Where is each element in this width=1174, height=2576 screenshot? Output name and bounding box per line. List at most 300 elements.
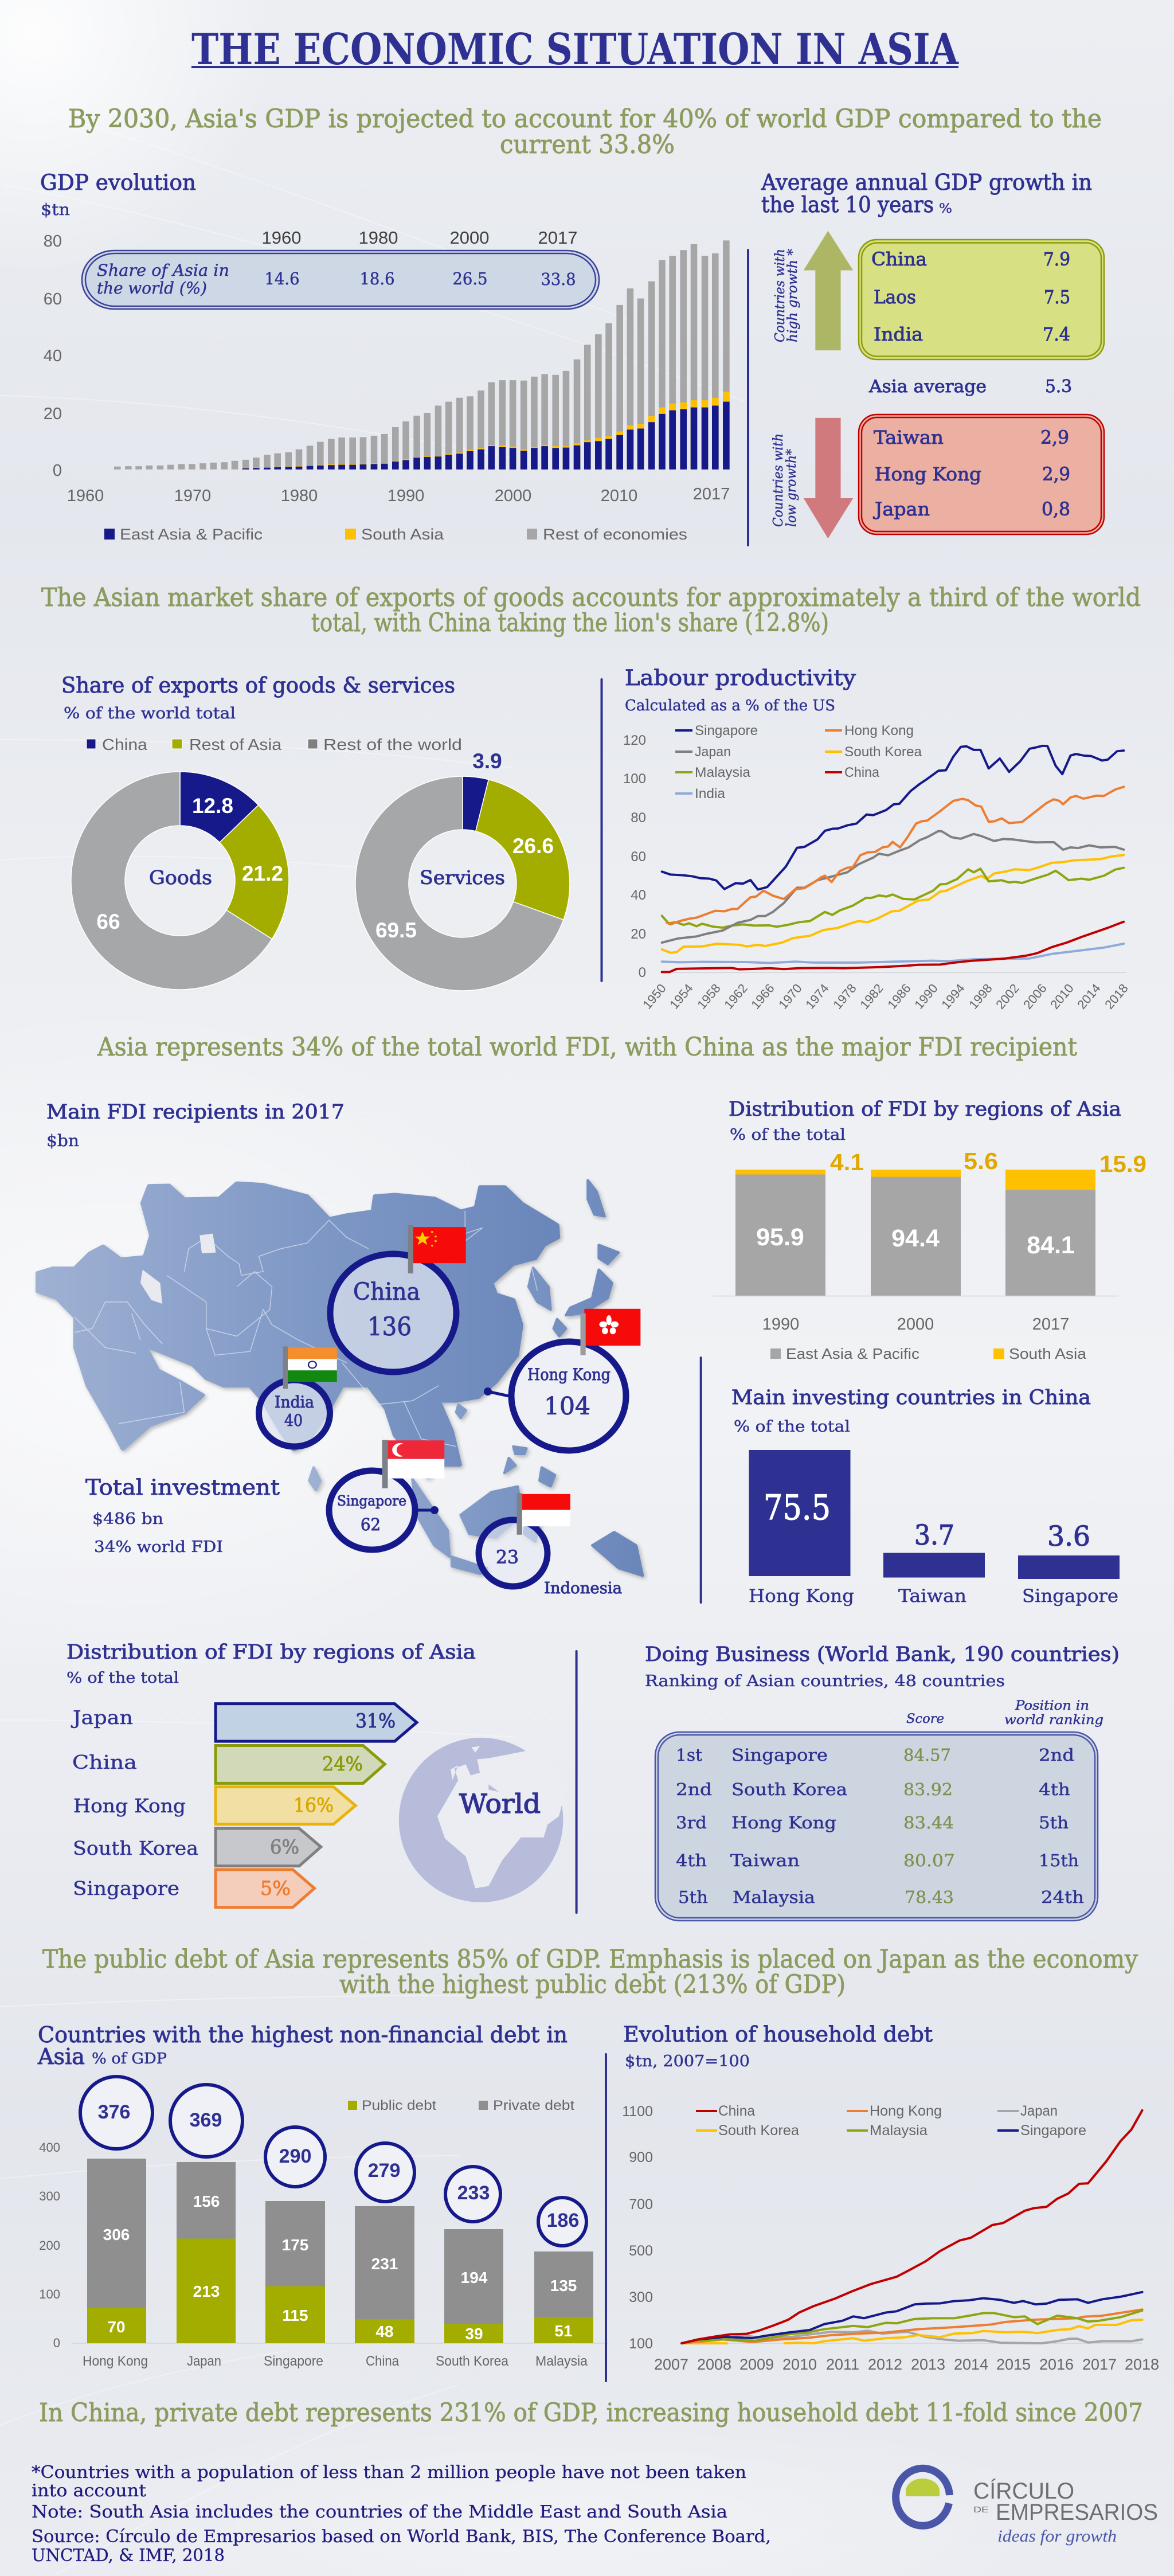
rotated label: high growth	[773, 249, 800, 342]
x axis labels: 2014	[1074, 981, 1103, 1012]
ranking table: 84.57	[903, 1745, 951, 1765]
legend: China	[102, 736, 147, 753]
y axis labels: 300	[39, 2189, 60, 2203]
x axis labels: 2018	[1102, 981, 1131, 1012]
stacked bars: 48	[375, 2323, 394, 2340]
subheading: Ranking of Asian countries, 48 countries	[645, 1672, 1005, 1690]
footnotes: Source: Círculo de Empresarios based on World Bank, BIS, The Conference Board,	[32, 2527, 771, 2547]
stacked bars: 231	[371, 2255, 398, 2273]
legend	[104, 526, 687, 543]
x axis labels: 2002	[993, 981, 1022, 1012]
x axis labels: 2010	[782, 2356, 817, 2373]
y axis labels: 40	[44, 347, 62, 365]
arrow values: 5%	[260, 1877, 291, 1900]
Asia average row	[868, 377, 1072, 397]
x axis labels	[640, 981, 1131, 1012]
legend: China	[844, 765, 880, 780]
icon: globe: World	[459, 1788, 541, 1819]
panel: average annual GDP growth	[761, 170, 1104, 538]
y axis labels: 40	[631, 888, 646, 903]
x axis labels: 2012	[868, 2356, 902, 2373]
box: high growth countries: China	[871, 248, 927, 270]
bars: 3.7	[914, 1519, 954, 1551]
title: THE ECONOMIC SITUATION IN ASIA	[191, 24, 960, 75]
section heading: FDI: Asia represents 34% of the total world FDI, with China as the major FDI recipient	[97, 1033, 1077, 1062]
legend: Singapore	[1020, 2122, 1086, 2139]
bars: Hong Kong	[749, 1586, 854, 1606]
legend: Rest of economies	[543, 526, 687, 543]
x axis labels: 2018	[1125, 2356, 1159, 2373]
share of Asia table: 33.8	[541, 269, 576, 289]
heading: GDP growth: the last 10 years	[761, 192, 934, 217]
rotated label: high growth: high growth *	[785, 249, 800, 342]
donut chart: services: 26.6	[512, 834, 554, 858]
legend: South Korea	[844, 744, 922, 760]
legend: Singapore	[695, 723, 758, 738]
category labels: South Korea	[436, 2354, 509, 2369]
x axis labels: 2010	[1047, 981, 1077, 1012]
ranking table: Malaysia	[733, 1887, 815, 1907]
bars: 3.6	[1047, 1520, 1090, 1553]
y axis labels: 80	[44, 232, 62, 251]
heading: main FDI recipients: Main FDI recipients in 2017	[46, 1101, 345, 1124]
share of Asia table: 2017	[538, 228, 577, 248]
x axis labels: 2015	[996, 2356, 1031, 2373]
donut chart: goods	[71, 772, 289, 990]
ring labels: China	[353, 1278, 420, 1305]
stacked bars: 51	[554, 2322, 573, 2340]
y axis labels: 20	[631, 927, 646, 942]
x axis labels: 1960	[67, 487, 104, 505]
category labels: Malaysia	[535, 2354, 588, 2369]
x axis labels: 1980	[281, 487, 318, 505]
stacked bars: 2000	[897, 1315, 934, 1334]
stacked bars: 2017	[1032, 1315, 1069, 1334]
ranking table: 83.44	[903, 1813, 954, 1832]
stacked bars: 84.1	[1027, 1232, 1075, 1259]
rotated label: high growth: Countries with	[773, 249, 788, 342]
legend: Japan	[1020, 2103, 1058, 2119]
footnotes	[32, 2462, 771, 2566]
column headings: Position in	[1015, 1699, 1089, 1713]
x axis labels: 1950	[640, 981, 669, 1012]
footnotes: Note: South Asia includes the countries of the Middle East and South Asia	[32, 2502, 727, 2522]
arrow: down	[804, 418, 853, 538]
India ring	[259, 1380, 330, 1447]
flag: India	[283, 1346, 337, 1389]
legend: Rest of the world	[323, 736, 462, 753]
box: low growth countries: 2,9	[1042, 463, 1070, 485]
box: low growth countries: Japan	[873, 498, 930, 520]
line chart: household debt	[682, 2110, 1142, 2343]
ranking table: 2nd	[676, 1780, 712, 1799]
stacked bars: 175	[282, 2236, 308, 2254]
box: high growth countries: 7.9	[1043, 248, 1070, 270]
box: low growth countries	[859, 415, 1104, 534]
category labels	[83, 2354, 588, 2369]
x axis labels: 1954	[667, 981, 696, 1012]
ranking table: 4th	[676, 1851, 707, 1870]
heading: Distribution of FDI by regions of Asia	[729, 1098, 1121, 1121]
donut chart: services: Services	[420, 866, 505, 889]
x axis labels: 2017	[1082, 2356, 1117, 2373]
total circles: 290	[279, 2145, 311, 2167]
legend: South Asia	[361, 526, 444, 543]
arrow values: 6%	[270, 1836, 299, 1859]
legend: Malaysia	[695, 765, 751, 780]
rings with FDI values	[259, 1254, 626, 1586]
stacked bars: 95.9	[756, 1223, 804, 1251]
donut chart: goods: 66	[96, 910, 120, 933]
legend: East Asia & Pacific	[786, 1345, 919, 1362]
legend	[770, 1345, 1087, 1362]
x axis labels: 1982	[857, 981, 886, 1012]
ranking table: Hong Kong	[731, 1813, 836, 1832]
category labels: Hong Kong	[83, 2354, 148, 2369]
x axis labels	[67, 485, 730, 505]
share of Asia table	[82, 228, 599, 309]
total circles	[80, 2077, 586, 2246]
column headings: world ranking	[1004, 1713, 1103, 1727]
share of Asia table: 1980	[359, 228, 398, 248]
subheading: % of the total	[734, 1418, 850, 1436]
stacked bars: 156	[193, 2192, 220, 2210]
box: low growth countries: 2,9	[1040, 427, 1069, 448]
legend: Hong Kong	[870, 2103, 942, 2119]
box: high growth countries	[859, 240, 1104, 359]
ring labels: Singapore	[337, 1493, 406, 1509]
bars	[749, 1450, 1120, 1606]
box: low growth countries: Taiwan	[874, 427, 944, 448]
heading: % of GDP	[92, 2050, 167, 2067]
y axis labels: 500	[629, 2243, 653, 2259]
rotated label: low growth	[771, 433, 799, 527]
panel: Doing Business ranking	[645, 1643, 1120, 1921]
donut chart: goods: Goods	[149, 866, 212, 889]
stacked bars: 39	[465, 2325, 483, 2343]
legend: East Asia & Pacific	[120, 526, 263, 543]
ranking table: South Korea	[731, 1780, 847, 1799]
line chart: labour productivity	[662, 746, 1126, 972]
bars: Taiwan	[898, 1586, 966, 1606]
legend: South Korea	[718, 2122, 799, 2139]
total circles: 233	[457, 2182, 490, 2204]
country labels: South Korea	[73, 1837, 198, 1859]
arrow values: 24%	[322, 1753, 363, 1776]
y axis labels	[39, 2140, 60, 2350]
y axis labels: 60	[631, 849, 646, 865]
ranking table: 80.07	[903, 1851, 955, 1870]
arrow values: 16%	[294, 1794, 334, 1817]
country labels: Hong Kong	[73, 1795, 186, 1817]
box: high growth countries: 7.4	[1043, 323, 1070, 345]
y axis labels	[623, 733, 646, 980]
box: low growth countries: Hong Kong	[875, 463, 981, 485]
panel: evolution of household debt	[622, 2022, 1159, 2373]
y axis labels: 100	[629, 2336, 653, 2352]
legend: China	[718, 2103, 755, 2119]
stacked bars: 135	[550, 2277, 577, 2294]
subheading: % of the total	[66, 1670, 179, 1687]
y axis labels: 20	[44, 405, 62, 423]
legend: Malaysia	[870, 2122, 928, 2139]
legend	[696, 2103, 1086, 2139]
x axis labels: 2017	[693, 485, 730, 503]
unit: $bn: $bn	[46, 1131, 79, 1150]
flag: Indonesia	[517, 1493, 570, 1535]
ranking table: 24th	[1041, 1887, 1084, 1907]
footnotes: into account	[32, 2481, 146, 2501]
heading: Asia	[37, 2044, 85, 2069]
box: high growth countries: Laos	[874, 286, 916, 308]
x axis labels	[654, 2356, 1159, 2373]
panel: labour productivity	[623, 666, 1131, 1012]
legend: Rest of Asia	[189, 736, 281, 753]
ranking table: Singapore	[731, 1745, 828, 1765]
section heading: GDP projection: By 2030, Asia's GDP is projected to account for 40% of world GDP compared to the	[68, 104, 1102, 134]
section heading: exports	[41, 583, 1141, 638]
Asia average row: 5.3	[1045, 377, 1072, 397]
legend: India	[695, 786, 726, 802]
box: high growth countries: India	[874, 323, 923, 345]
ranking table: 5th	[678, 1887, 708, 1907]
country labels: Singapore	[73, 1877, 179, 1899]
y axis labels	[622, 2104, 653, 2352]
legend: South Asia	[1009, 1345, 1087, 1362]
panel: share of exports	[61, 673, 570, 991]
heading	[37, 2022, 568, 2069]
rotated label: low growth: Countries with	[771, 433, 786, 527]
y axis labels: 200	[39, 2238, 60, 2253]
box: high growth countries: 7.5	[1044, 286, 1070, 308]
stacked bars: 115	[282, 2307, 308, 2324]
x axis labels: 1958	[694, 981, 723, 1012]
bars: Singapore	[1022, 1586, 1118, 1606]
share of Asia table: 18.6	[360, 269, 394, 288]
Singapore ring	[329, 1471, 439, 1550]
legend: Private debt	[493, 2098, 574, 2113]
country labels: Japan	[71, 1706, 133, 1729]
flag: Singapore	[382, 1440, 444, 1488]
donut chart: services: 3.9	[472, 749, 502, 773]
section heading: public debt: with the highest public debt (213% of GDP)	[339, 1970, 846, 1999]
ranking table: 83.92	[903, 1780, 953, 1799]
panel: main FDI recipients	[38, 1101, 643, 1597]
total circles: 186	[547, 2210, 579, 2231]
legend	[348, 2098, 574, 2113]
heading: share of exports: Share of exports of goods & services	[61, 673, 455, 698]
legend	[87, 736, 462, 753]
heading: GDP growth: Average annual GDP growth in	[761, 170, 1092, 195]
donut chart: goods: 21.2	[242, 862, 283, 885]
x axis labels: 2016	[1039, 2356, 1074, 2373]
arrow bars	[216, 1704, 417, 1907]
total circles: 369	[190, 2109, 222, 2131]
share of Asia table: 1960	[262, 228, 301, 248]
x axis labels: 1970	[174, 487, 211, 505]
share of Asia table: the world (%)	[97, 279, 207, 298]
y axis labels: 700	[629, 2196, 653, 2213]
y axis labels: 0	[53, 462, 62, 480]
category labels: China	[366, 2354, 400, 2369]
share of Asia table: 2000	[450, 228, 489, 248]
stacked bars: 70	[107, 2318, 126, 2336]
x axis labels: 2009	[739, 2356, 774, 2373]
Hong Kong ring	[484, 1342, 626, 1451]
flag: China	[408, 1225, 466, 1273]
stacked bars	[713, 1148, 1146, 1334]
ring labels	[275, 1278, 622, 1597]
logo: Círculo de Empresarios: DE	[973, 2505, 989, 2515]
stacked bars: 94.4	[891, 1225, 940, 1252]
arrow: up	[804, 231, 853, 350]
x axis labels: 1970	[776, 981, 805, 1012]
ranking table: Taiwan	[730, 1851, 800, 1870]
ranking table: 4th	[1039, 1780, 1070, 1799]
x axis labels: 1962	[721, 981, 750, 1012]
logo: Círculo de Empresarios: EMPRESARIOS	[996, 2500, 1158, 2525]
ring labels: 104	[544, 1392, 590, 1420]
donut chart: services: 69.5	[375, 918, 417, 942]
subheading: Calculated as a % of the US	[625, 697, 835, 714]
y axis labels: 80	[631, 810, 646, 826]
heading: GDP growth: %	[939, 202, 952, 216]
flag: Hong Kong	[580, 1309, 640, 1355]
country labels: China	[72, 1751, 137, 1773]
heading: Doing Business (World Bank, 190 countries)	[645, 1643, 1120, 1666]
heading: Evolution of household debt	[623, 2022, 933, 2047]
Indonesia ring	[479, 1520, 547, 1586]
stacked bar chart: GDP by region	[118, 240, 726, 470]
x axis labels: 2000	[495, 487, 531, 505]
column headings: Score	[906, 1712, 944, 1726]
ranking table: 5th	[1039, 1813, 1069, 1832]
legend: Japan	[695, 744, 731, 760]
unit: $tn: $tn	[41, 200, 70, 219]
logo: Círculo de Empresarios: ideas for growth	[997, 2527, 1117, 2546]
x axis labels: 2008	[697, 2356, 731, 2373]
stacked bars: 194	[461, 2269, 488, 2286]
total circles: 279	[368, 2160, 400, 2182]
arrow values: 31%	[355, 1710, 396, 1733]
y axis labels: 400	[39, 2140, 60, 2155]
panel: distribution of FDI by regions (world)	[66, 1641, 566, 1907]
y axis labels: 100	[39, 2287, 60, 2301]
stacked bars	[72, 2159, 608, 2343]
y axis labels: 900	[629, 2149, 653, 2165]
share of Asia table: 26.5	[453, 269, 487, 288]
x axis labels: 1994	[938, 981, 968, 1012]
legend	[675, 723, 922, 802]
stacked bars: 213	[193, 2282, 220, 2300]
stacked bars: 1990	[762, 1315, 799, 1334]
map of Asia	[38, 1180, 643, 1576]
rotated label: low growth: low growth*	[784, 449, 799, 527]
heading: GDP growth	[761, 170, 1092, 217]
ranking table: 15th	[1039, 1851, 1079, 1870]
category labels: Japan	[187, 2354, 221, 2369]
heading: GDP evolution: GDP evolution	[40, 170, 196, 195]
y axis labels	[44, 232, 62, 480]
total investment callout	[85, 1475, 280, 1556]
share of Asia table: Share of Asia in	[97, 261, 229, 280]
x axis labels: 1974	[803, 981, 832, 1012]
bars: 75.5	[764, 1488, 831, 1528]
ranking table	[655, 1732, 1098, 1921]
category labels: Singapore	[264, 2354, 323, 2369]
y axis labels: 300	[629, 2289, 653, 2305]
stacked bars: 306	[103, 2226, 130, 2243]
icon: globe	[399, 1738, 566, 1902]
x axis labels: 2014	[954, 2356, 988, 2373]
y axis labels: 0	[53, 2336, 60, 2350]
heading: Main investing countries in China	[731, 1386, 1091, 1409]
logo: Círculo de Empresarios	[896, 2468, 1158, 2546]
China ring	[330, 1254, 456, 1372]
subheading: % of the total	[730, 1126, 846, 1144]
heading: Distribution of FDI by regions of Asia	[66, 1641, 476, 1664]
ranking table: 2nd	[1039, 1745, 1074, 1765]
y axis labels: 0	[639, 965, 646, 980]
y axis labels: 60	[44, 290, 62, 308]
legend: Hong Kong	[844, 723, 914, 738]
ring labels: Indonesia	[544, 1580, 622, 1597]
country labels	[71, 1706, 198, 1899]
arrow values	[260, 1710, 396, 1900]
ring labels: 40	[284, 1411, 303, 1430]
x axis labels: 2011	[826, 2356, 859, 2373]
panel: non-financial debt	[37, 2022, 608, 2369]
share of Asia table: 14.6	[265, 269, 299, 288]
footnotes: UNCTAD, & IMF, 2018	[32, 2546, 225, 2566]
stacked bars: 15.9	[1099, 1151, 1146, 1177]
section heading: GDP projection: current 33.8%	[500, 130, 675, 159]
section heading: GDP projection	[68, 104, 1102, 159]
box: low growth countries: 0,8	[1042, 498, 1070, 520]
column headings	[906, 1699, 1103, 1727]
x axis labels: 1978	[830, 981, 859, 1012]
donut chart: goods: 12.8	[192, 794, 233, 818]
subheading: $tn, 2007=100	[625, 2053, 750, 2070]
y axis labels: 120	[623, 733, 646, 748]
stacked bars: 5.6	[964, 1148, 998, 1174]
section heading: public debt	[42, 1945, 1138, 1999]
section heading: exports: total, with China taking the lion's share (12.8%)	[311, 608, 829, 638]
x axis labels: 1986	[885, 981, 914, 1012]
x axis labels: 2010	[601, 487, 637, 505]
y axis labels: 1100	[622, 2104, 653, 2120]
y axis labels: 100	[623, 771, 646, 787]
panel: distribution of FDI by regions (bars)	[713, 1098, 1146, 1362]
x axis labels: 2007	[654, 2356, 688, 2373]
flags	[283, 1225, 640, 1535]
x axis labels: 1966	[748, 981, 777, 1012]
x axis labels: 1990	[911, 981, 941, 1012]
panel: GDP evolution	[40, 170, 730, 543]
x axis labels: 1990	[388, 487, 424, 505]
ranking table: 1st	[676, 1745, 702, 1765]
ring labels: 62	[361, 1515, 381, 1534]
heading: Countries with the highest non-financial debt in	[38, 2022, 568, 2047]
ring labels: 136	[367, 1312, 412, 1342]
legend: Public debt	[362, 2098, 436, 2113]
footnotes: *Countries with a population of less than 2 million people have not been taken	[32, 2462, 746, 2483]
subheading: % of the world total	[64, 705, 236, 722]
ring labels: Hong Kong	[527, 1365, 611, 1384]
total circles: 376	[98, 2101, 130, 2123]
ring labels: 23	[496, 1546, 519, 1568]
total investment callout: Total investment	[85, 1475, 280, 1500]
